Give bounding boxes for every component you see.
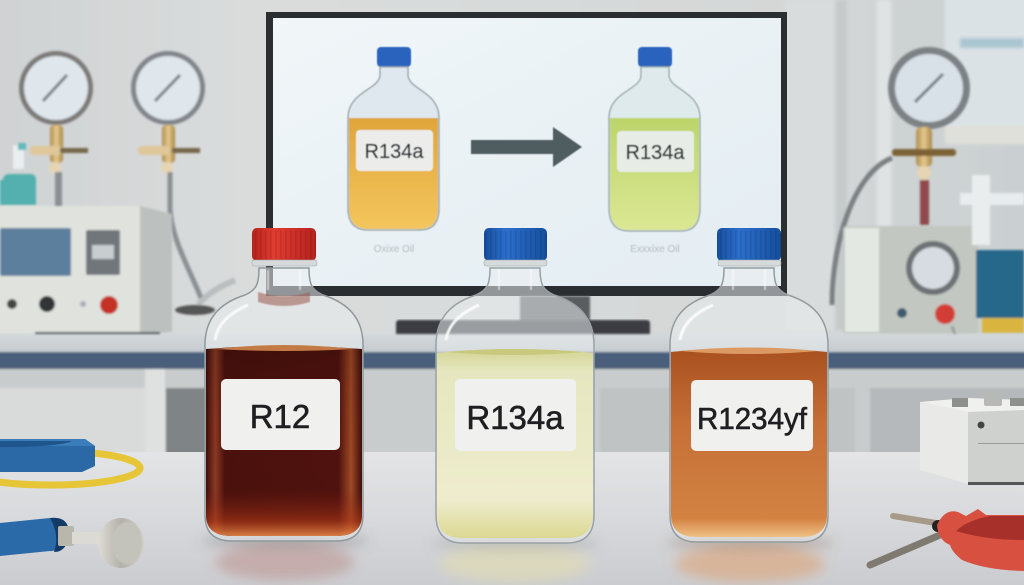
bottle body	[436, 268, 594, 543]
bottle: R12	[205, 228, 363, 541]
pale yellow oil	[437, 349, 593, 538]
label R1234yf: R1234yf	[697, 401, 807, 436]
blue cap	[484, 228, 547, 261]
screen captions	[374, 244, 680, 255]
screen bottle: green R134a	[609, 47, 700, 231]
screen bottle: amber R134a	[348, 47, 439, 230]
label R134a	[455, 379, 576, 451]
screen captions: Oxixe Oil	[374, 244, 414, 255]
screen arrow	[471, 127, 582, 167]
table	[0, 452, 1024, 585]
reflections on table	[200, 535, 835, 582]
dark red oil	[206, 346, 362, 536]
wrench right	[870, 509, 1024, 571]
bottle: R134a	[436, 228, 594, 543]
label R1234yf	[691, 380, 813, 451]
blue cap	[717, 228, 781, 261]
right gauge and instrument	[832, 47, 1024, 395]
small device right	[920, 390, 1024, 485]
left instrument	[0, 206, 172, 336]
label R134a: R134a	[466, 399, 564, 436]
screen bottle: amber R134a: R134a	[365, 141, 424, 163]
bottle body	[205, 268, 363, 541]
orange oil	[671, 348, 827, 537]
screen captions: Exxxixe Oil	[630, 244, 680, 255]
bottle body	[670, 268, 828, 542]
bottle: R1234yf	[670, 228, 828, 542]
lab counter	[0, 334, 1024, 455]
red cap	[252, 228, 316, 261]
monitor	[266, 12, 787, 338]
label R12: R12	[250, 398, 310, 435]
tool left	[0, 518, 144, 568]
background wall	[0, 0, 1024, 340]
left gauges	[0, 51, 235, 315]
label R12	[221, 379, 340, 450]
yellow ring and blue block left	[0, 439, 140, 485]
screen bottle: green R134a: R134a	[626, 142, 685, 164]
